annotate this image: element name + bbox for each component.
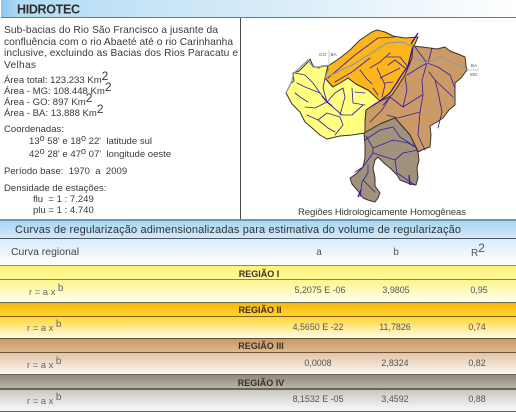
region IV grey (350, 118, 419, 202)
text block: coordinates: 07' longitude oeste (86, 149, 171, 160)
text block: coordinates: 22' latitude sul (86, 136, 152, 147)
região III: r = a x (27, 359, 53, 370)
região III: 2,8324 (381, 358, 409, 368)
table: regularization curves (0, 219, 516, 412)
região III: b (56, 356, 62, 367)
região IV: 8,1532 E -05 (293, 394, 343, 404)
text block: station density: plu = 1 : 4.740 (33, 205, 94, 216)
text block: areas: 2 (97, 102, 104, 116)
text block: areas: Área - MG: 108.448 Km (4, 86, 105, 97)
text block: coordinates: 58' e 18 (45, 136, 81, 147)
map: hydrologically homogeneous regions (286, 30, 479, 218)
região I: b (58, 283, 64, 294)
região IV: REGIÃO IV (238, 378, 284, 388)
column headers: a (316, 247, 322, 258)
text block: coordinates: Coordenadas: (4, 124, 64, 135)
text block: areas (4, 69, 112, 119)
região III (0, 339, 516, 375)
state boundary labels: GO (319, 52, 327, 57)
map caption: Regiões Hidrologicamente Homogêneas (298, 207, 466, 218)
região II: 0,74 (468, 322, 486, 332)
column headers: Curva regional (11, 247, 79, 258)
region III brown (365, 46, 467, 152)
column headers: R (471, 248, 478, 259)
state boundary labels: BA (330, 52, 338, 57)
região I: r = a x (29, 286, 55, 297)
text block: coordinates: o (40, 133, 45, 143)
região III: 0,82 (468, 358, 486, 368)
state boundary labels: MG (470, 72, 478, 77)
table heading: Curvas de regularização adimensionalizadas para estimativa do volume de regularização (15, 224, 461, 236)
text block: areas: 2 (86, 91, 93, 105)
região IV (0, 375, 516, 412)
região III: 0,0008 (304, 358, 332, 368)
text block: coordinates: 42 (29, 149, 40, 160)
text block: station density: Densidade de estações: (4, 183, 106, 194)
região I (0, 266, 516, 303)
região IV: b (56, 392, 62, 403)
região IV: 3,4592 (381, 394, 409, 404)
text block: base period: Período base: 1970 a 2009 (4, 166, 127, 177)
state boundary labels (319, 50, 479, 77)
região II: r = a x (27, 322, 53, 333)
região II: 11,7826 (379, 322, 411, 332)
text block: description: Sub-bacias do Rio São Francisco a jusante da (4, 25, 218, 36)
text block: coordinates (4, 124, 171, 160)
região III: REGIÃO III (238, 341, 284, 351)
text block: coordinates: o (81, 133, 86, 143)
header bar (1, 0, 516, 18)
text block: areas: Área - BA: 13.888 Km (4, 108, 97, 119)
região II: 4,5650 E -22 (293, 322, 343, 332)
text block: station density: flu = 1 : 7.249 (33, 194, 94, 205)
text block: areas: Área total: 123.233 Km (4, 75, 102, 86)
região IV: r = a x (27, 395, 53, 406)
rivers (286, 33, 468, 197)
text block: coordinates: 28' e 47 (45, 149, 81, 160)
text block: station density (4, 183, 106, 216)
column headers: b (393, 247, 399, 258)
column headers (0, 239, 516, 266)
text block: areas: 2 (105, 80, 112, 94)
text block: coordinates: 13 (29, 136, 40, 147)
region II orange (325, 30, 418, 101)
column headers: 2 (478, 241, 485, 255)
região I: REGIÃO I (239, 269, 279, 279)
text block: description: Velhas (4, 60, 36, 71)
região IV: 0,88 (468, 394, 486, 404)
state boundary labels: BA (471, 63, 478, 68)
região I: 5,2075 E -06 (295, 285, 345, 295)
text block: coordinates: o (40, 146, 45, 156)
text block: description: inclusive, excluindo as Bacias dos Rios Paracatu e (4, 48, 238, 59)
title: HIDROTEC (17, 2, 80, 16)
região II: REGIÃO II (238, 305, 282, 315)
region I yellow (286, 59, 380, 139)
região I: 0,95 (470, 285, 488, 295)
text block: areas: 2 (102, 69, 109, 83)
região II (0, 303, 516, 339)
text block: areas: Área - GO: 897 Km (4, 97, 86, 108)
região I: 3,9805 (382, 285, 410, 295)
panel: basin description (4, 18, 241, 220)
text block: description (4, 25, 238, 71)
table heading (0, 219, 516, 239)
text block: description: confluência com o rio Abaeté até o rio Carinhanha (4, 37, 233, 48)
text block: coordinates: o (81, 146, 86, 156)
região II: b (56, 319, 62, 330)
